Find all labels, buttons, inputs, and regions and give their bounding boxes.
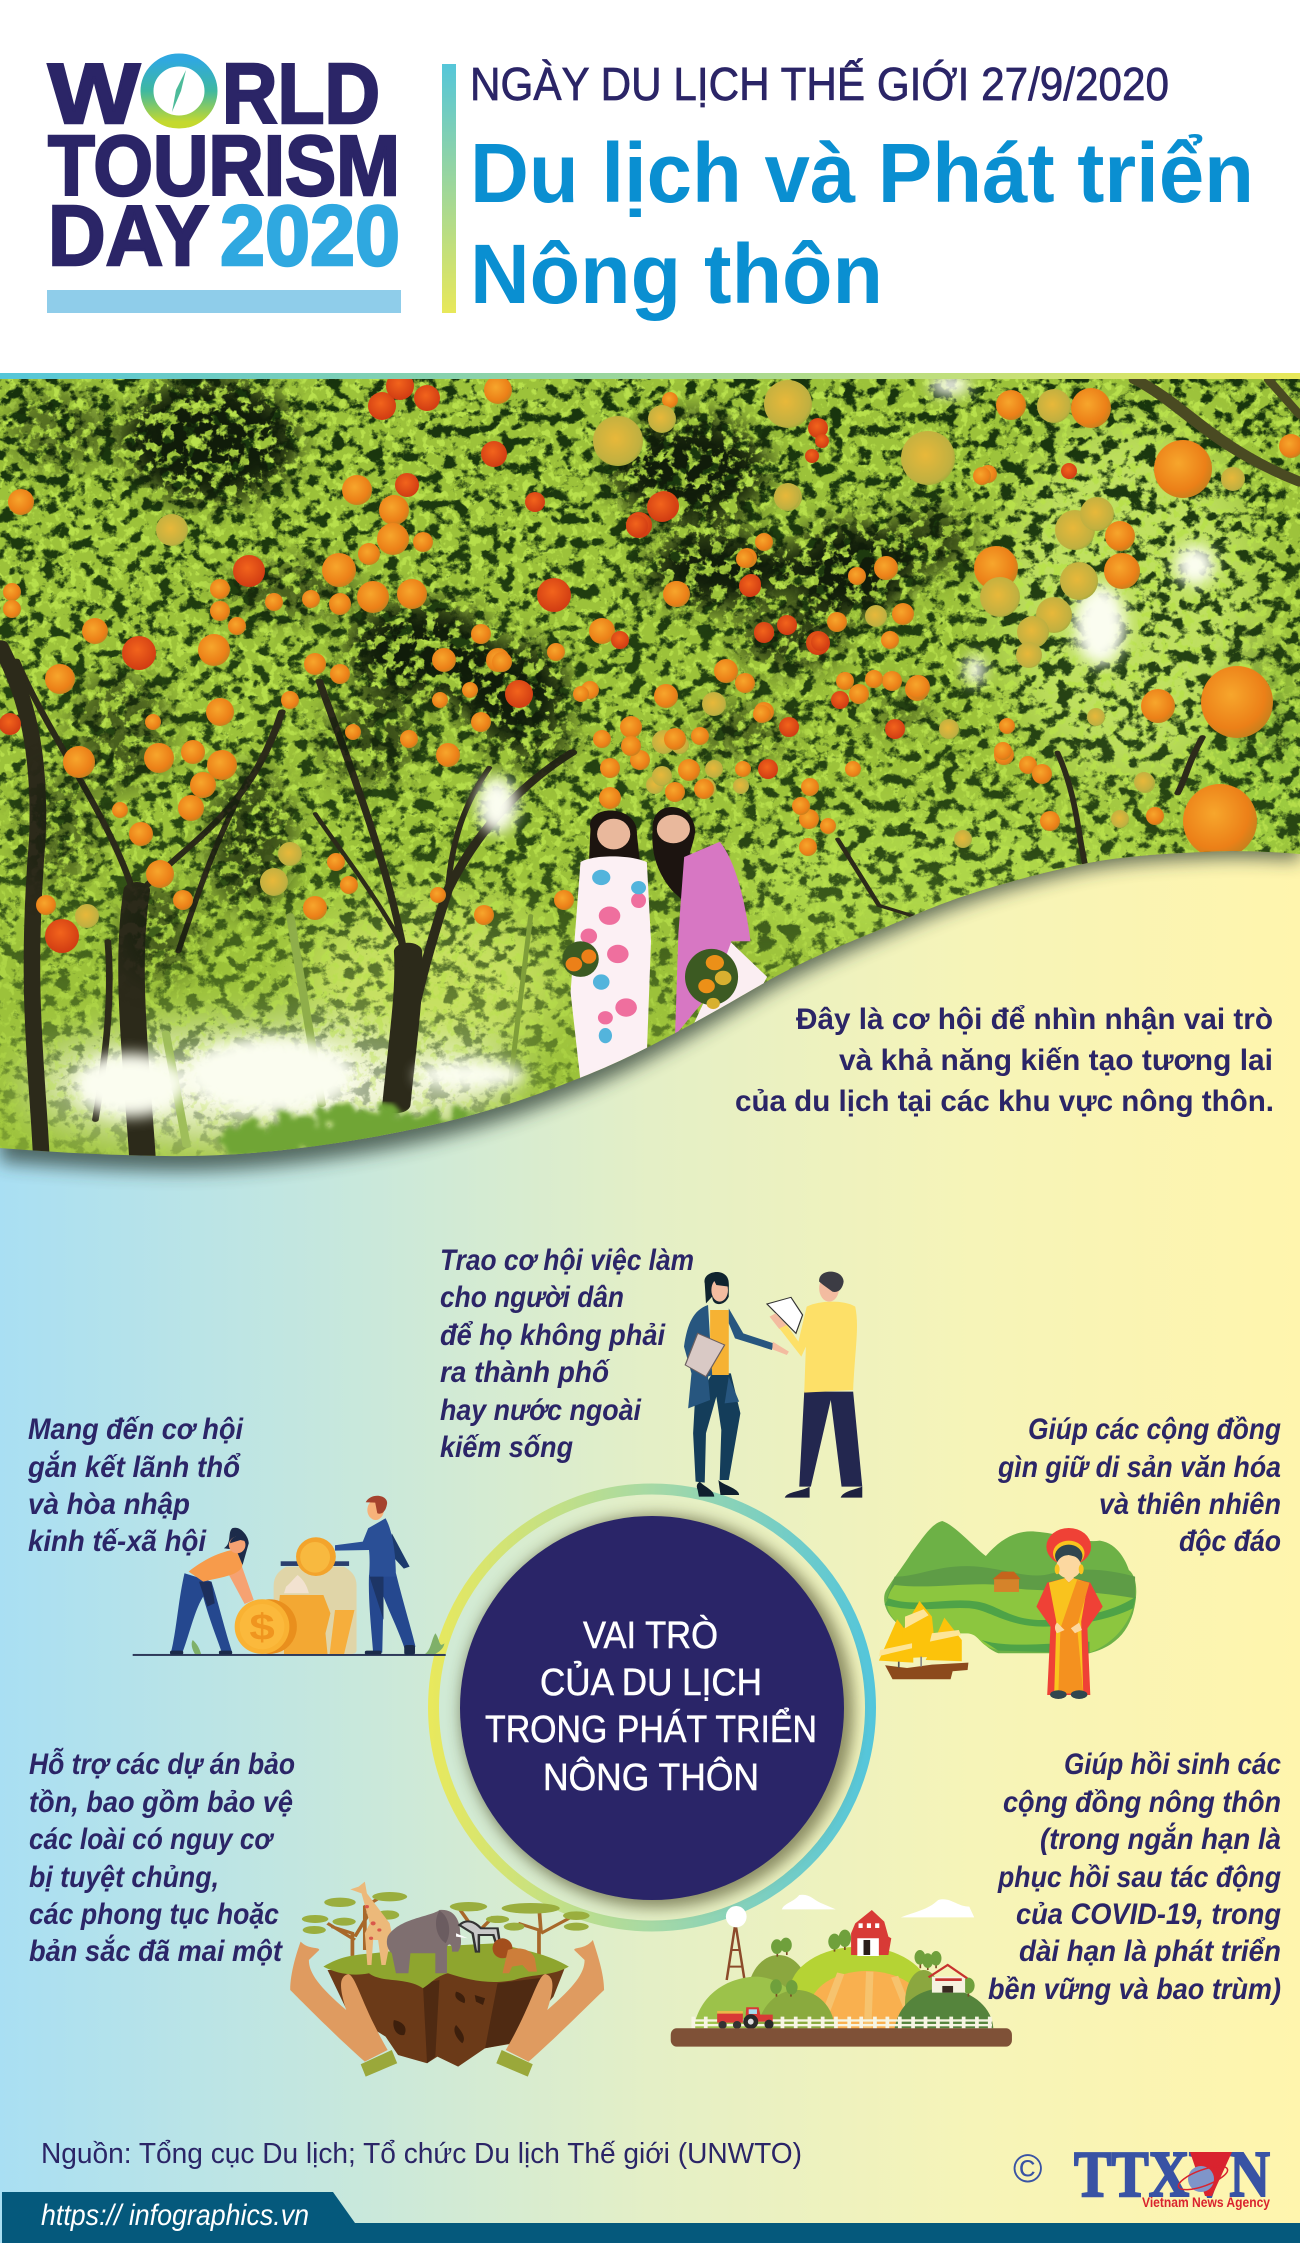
gradient lower panel background — [0, 800, 1300, 2243]
colored strip below header — [0, 373, 1300, 379]
mountains and terraces — [884, 1521, 1136, 1653]
text: left role, integration: Mang đến cơ hội — [28, 1413, 244, 1446]
title — [470, 126, 1254, 321]
clouds — [782, 1895, 974, 1917]
photo: orange orchard with two women — [0, 372, 1300, 1164]
text: bottom-right role, revival — [988, 1748, 1281, 2006]
icon: two people saving coins in a jar — [133, 1496, 446, 1656]
text: left role, integration: và hòa nhập — [28, 1488, 190, 1521]
text: bottom-left role, conservation: bị tuyệt chủng, — [29, 1861, 219, 1894]
title: Du lịch và Phát triển — [470, 126, 1254, 220]
footer bar — [2, 2192, 1300, 2243]
logo: World Tourism Day 2020: TOURISM — [48, 119, 400, 214]
woman in traditional dress — [1036, 1528, 1103, 1699]
man with yellow sweater — [767, 1272, 862, 1498]
text: bottom-left role, conservation: các loài có nguy cơ — [29, 1823, 274, 1856]
text: top role, jobs — [440, 1244, 694, 1464]
text: bottom-left role, conservation: Hỗ trợ các dự án bảo — [29, 1747, 295, 1781]
text: bottom-right role, revival: (trong ngắn hạn là — [1040, 1822, 1281, 1856]
dark leaf clusters — [5, 375, 1290, 980]
text: right role, heritage: và thiên nhiên — [1099, 1488, 1281, 1521]
circle heading text: NÔNG THÔN — [543, 1755, 759, 1799]
lead text on curve — [735, 1003, 1274, 1118]
icon: landscape, junk boat and woman in ao dai — [879, 1521, 1136, 1699]
text: right role, heritage: độc đáo — [1179, 1525, 1281, 1558]
oranges — [0, 372, 1300, 953]
grass on ground — [216, 1102, 490, 1154]
text: bottom-left role, conservation: tồn, bao gồm bảo vệ — [29, 1786, 293, 1819]
title: Nông thôn — [470, 227, 883, 321]
bright sky gaps — [75, 375, 1215, 1117]
logo: World Tourism Day 2020: DAY — [48, 189, 209, 284]
red tractor — [717, 2007, 774, 2029]
footer url: https:// infographics.vn — [41, 2199, 309, 2232]
text: top role, jobs: cho người dân — [440, 1281, 624, 1314]
island soil — [323, 1943, 569, 2067]
woman with clipboard — [684, 1272, 789, 1497]
copyright mark: © — [1013, 2147, 1042, 2191]
icon: farm with hills, barn, windmill and tractor — [671, 1895, 1012, 2047]
icon: compass ring letter O — [147, 60, 211, 122]
left cuff — [361, 2050, 397, 2077]
junk boat — [879, 1601, 968, 1679]
white fence — [691, 2017, 992, 2029]
text: top role, jobs: hay nước ngoài — [440, 1394, 642, 1427]
source line: Nguồn: Tổng cục Du lịch; Tổ chức Du lịch Thế giới (UNWTO) — [41, 2138, 802, 2170]
icon: floating island with animals held by hands — [290, 1882, 604, 2077]
jar — [274, 1537, 357, 1654]
text: bottom-left role, conservation: bản sắc đã mai một — [29, 1934, 284, 1968]
mottled foliage — [0, 379, 1300, 1159]
text: bottom-left role, conservation: các phong tục hoặc — [29, 1898, 279, 1931]
logo: TTXVN Vietnam News Agency: TTXVN — [1074, 2138, 1270, 2211]
windmill — [726, 1906, 747, 1980]
icon: business people talking — [684, 1272, 862, 1498]
heading: date line: NGÀY DU LỊCH THẾ GIỚI 27/9/2020 — [470, 58, 1169, 110]
soil bar — [671, 2028, 1012, 2047]
right cuff — [496, 2050, 533, 2077]
text: bottom-right role, revival: dài hạn là phát triển — [1019, 1935, 1281, 1968]
white header background — [0, 0, 1300, 373]
text: left role, integration: kinh tế-xã hội — [28, 1525, 207, 1558]
text: bottom-right role, revival: của COVID-19, trong — [1016, 1898, 1281, 1931]
circle heading text: CỦA DU LỊCH — [540, 1660, 762, 1704]
text: top role, jobs: để họ không phải — [440, 1319, 666, 1352]
bouquets of oranges — [562, 941, 738, 1009]
lead text on curve: Đây là cơ hội để nhìn nhận vai trò — [796, 1003, 1273, 1036]
circle heading text — [485, 1614, 817, 1799]
central circle with ring — [434, 1489, 870, 1926]
text: top role, jobs: Trao cơ hội việc làm — [440, 1244, 694, 1277]
hills — [694, 1947, 993, 2046]
elephant — [387, 1910, 468, 1973]
giraffe — [350, 1882, 392, 1965]
text: left role, integration: gắn kết lãnh thổ — [27, 1450, 241, 1484]
white farmhouse — [929, 1965, 967, 1993]
logo: World Tourism Day 2020: W — [48, 47, 141, 142]
logo: World Tourism Day 2020: 2020 — [220, 189, 400, 284]
right hand — [506, 1940, 604, 2062]
vertical gradient divider — [442, 64, 456, 313]
tree trunks and branches — [0, 380, 1300, 1161]
woman in dotted dress — [571, 810, 651, 1082]
big coin: $ — [249, 1607, 275, 1647]
curve shadow under photo — [0, 400, 1300, 1171]
two women in ao dai — [562, 807, 767, 1082]
light and sunlit background areas — [30, 420, 1300, 1135]
zebra — [459, 1921, 500, 1952]
woman with coin — [170, 1528, 254, 1655]
big coin — [235, 1599, 297, 1654]
circle heading text: VAI TRÒ — [583, 1614, 718, 1657]
text: bottom-left role, conservation — [29, 1747, 295, 1968]
circle heading text: TRONG PHÁT TRIỂN — [485, 1706, 817, 1751]
woman in pink dress — [652, 807, 767, 1036]
lion — [493, 1938, 537, 1973]
left hand — [290, 1942, 388, 2062]
text: left role, integration — [27, 1413, 244, 1558]
lead text on curve: của du lịch tại các khu vực nông thôn. — [735, 1085, 1274, 1118]
small house — [992, 1572, 1021, 1592]
lead text on curve: và khả năng kiến tạo tương lai — [839, 1044, 1273, 1077]
text: right role, heritage — [997, 1413, 1281, 1558]
red barn — [851, 1910, 891, 1956]
text: top role, jobs: kiếm sống — [440, 1431, 573, 1464]
text: top role, jobs: ra thành phố — [440, 1356, 611, 1389]
logo: World Tourism Day 2020 — [47, 47, 401, 313]
logo: World Tourism Day 2020: RLD — [222, 47, 380, 142]
trees on hills — [770, 1930, 975, 1997]
man dropping coin — [335, 1496, 415, 1655]
trees — [302, 1892, 590, 1965]
logo: TTXVN Vietnam News Agency: Vietnam News Agency — [1142, 2194, 1270, 2210]
